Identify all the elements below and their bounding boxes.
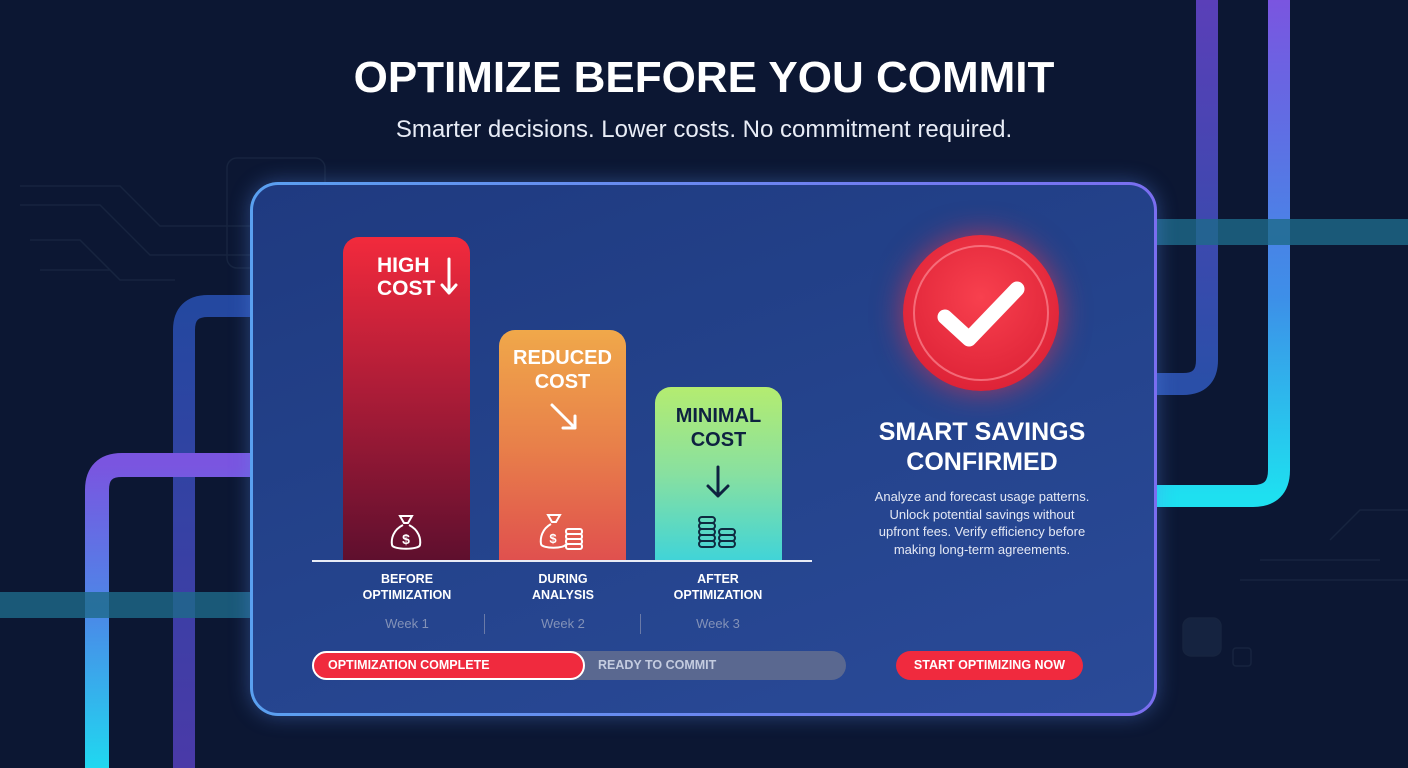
bar: reduced cost	[499, 330, 626, 561]
bar: minimal cost: COST	[691, 429, 746, 451]
title: OPTIMIZE BEFORE YOU COMMIT	[354, 53, 1054, 102]
axis labels: AFTER	[697, 572, 739, 586]
axis labels: BEFORE	[381, 572, 433, 586]
bar: high cost: HIGH	[377, 254, 430, 277]
bar: reduced cost: REDUCED	[513, 347, 612, 369]
heading: smart savings	[879, 418, 1085, 476]
button: start optimizing	[896, 651, 1083, 680]
bar: high cost	[343, 237, 470, 561]
axis labels: OPTIMIZATION	[674, 588, 762, 602]
bar: high cost: $	[402, 531, 410, 547]
bar: minimal cost	[655, 387, 782, 561]
axis labels	[363, 572, 762, 634]
progress bar	[312, 651, 846, 680]
axis labels: Week 1	[385, 616, 429, 631]
bar: reduced cost: $	[549, 531, 557, 546]
progress bar: READY TO COMMIT	[598, 658, 716, 672]
bar: minimal cost: MINIMAL	[676, 405, 761, 427]
text: description: Unlock potential savings without	[890, 506, 1074, 522]
heading: smart savings: SMART SAVINGS	[879, 418, 1085, 446]
axis labels: Week 2	[541, 616, 585, 631]
axis labels: Week 3	[696, 616, 740, 631]
text: description	[874, 489, 1089, 556]
text: description: Analyze and forecast usage patterns.	[875, 489, 1089, 504]
baseline	[312, 560, 812, 562]
subtitle: Smarter decisions. Lower costs. No commitment required.	[396, 116, 1012, 143]
panel: main card	[250, 182, 1157, 716]
axis labels: ANALYSIS	[532, 588, 594, 602]
bar: reduced cost: COST	[535, 371, 590, 393]
button: start optimizing: START OPTIMIZING NOW	[914, 658, 1065, 672]
heading: smart savings: CONFIRMED	[906, 448, 1058, 476]
text: description: making long-term agreements.	[894, 542, 1070, 556]
bar: high cost: COST	[377, 277, 435, 300]
axis labels: DURING	[538, 572, 588, 586]
text: description: upfront fees. Verify efficiency before	[879, 524, 1085, 539]
icon: check badge	[903, 235, 1059, 391]
bar chart	[343, 237, 782, 560]
axis labels: OPTIMIZATION	[363, 588, 451, 602]
progress bar: OPTIMIZATION COMPLETE	[328, 658, 490, 672]
